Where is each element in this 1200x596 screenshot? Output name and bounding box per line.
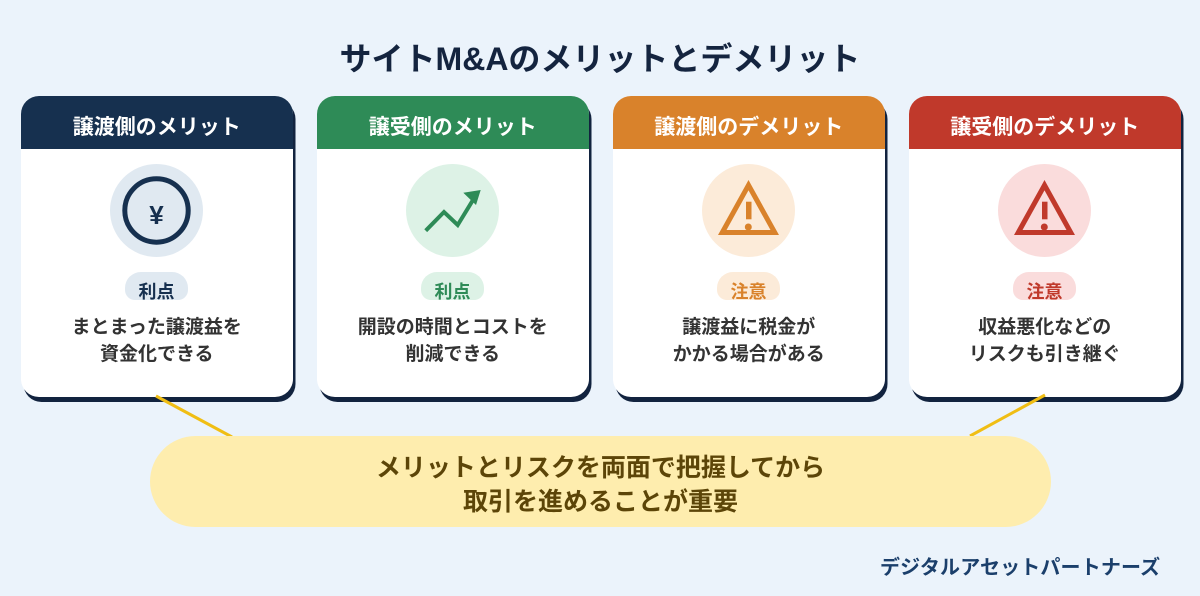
callout: メリットとリスクを両面で把握してから [376,454,825,482]
icon: warning [998,164,1091,257]
icon: warning [702,164,795,257]
text [969,316,1121,365]
badge [1013,272,1076,300]
text: 資金化できる [100,344,214,365]
text: 譲渡益に税金が [682,317,815,338]
heading [613,96,884,149]
text [673,316,825,365]
icon: yen coin: ¥ [149,200,164,230]
text: リスクも引き継ぐ [969,344,1121,365]
panel: buyer merit [317,96,588,397]
heading [909,96,1180,149]
text: かかる場合がある [673,344,825,365]
text [72,316,242,365]
text: 開設の時間とコストを [358,317,548,338]
icon: yen coin [110,164,203,257]
badge [421,272,484,300]
badge [125,272,188,300]
heading: 譲渡側のメリット [73,116,241,139]
text: まとまった譲渡益を [72,317,242,338]
heading: 譲受側のデメリット [950,116,1139,139]
text: 削減できる [405,344,500,365]
badge [717,272,780,300]
panel: seller merit [21,96,292,397]
panel: buyer demerit [909,96,1180,397]
callout [150,436,1051,527]
heading [21,96,292,149]
heading [317,96,588,149]
text [358,316,548,365]
brand credit: デジタルアセットパートナーズ [880,557,1160,579]
heading: 譲渡側のデメリット [654,116,843,139]
panel: seller demerit [613,96,884,397]
icon: rising chart arrow [406,164,499,257]
heading: 譲受側のメリット [369,116,537,139]
text: 収益悪化などの [978,317,1111,338]
title: サイトM&Aのメリットとデメリット [340,41,860,77]
callout: 取引を進めることが重要 [463,488,738,516]
